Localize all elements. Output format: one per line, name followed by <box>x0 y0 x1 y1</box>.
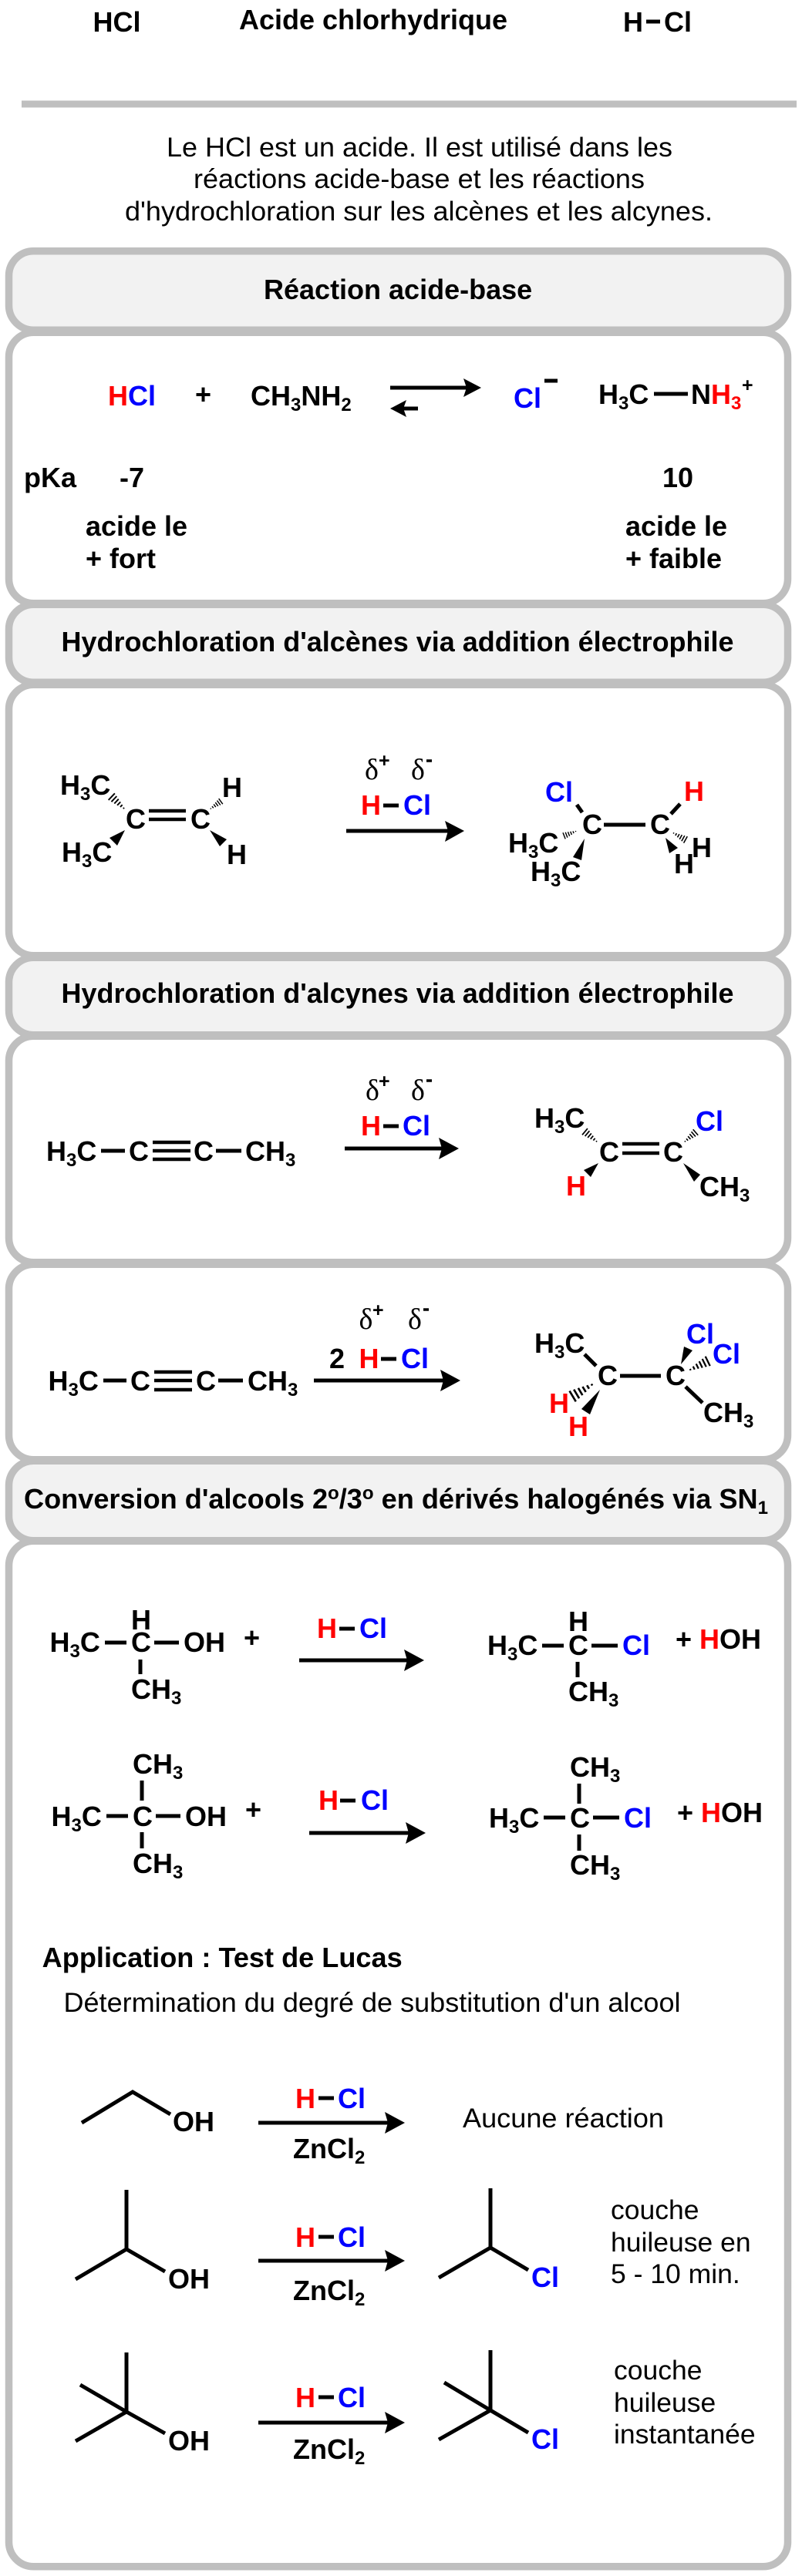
reagent: partial charges and 2 HCl: H <box>359 1343 379 1374</box>
tertiary chloride product: C <box>570 1802 590 1834</box>
heading: conversion of alcohols: Conversion d'alcools 2 <box>24 1483 327 1515</box>
reaction arrow <box>299 1650 424 1671</box>
tertiary chloride product: 3 <box>610 1766 620 1787</box>
reactant alkyne: C <box>194 1135 214 1167</box>
secondary alcohol reactant: C <box>131 1626 151 1658</box>
heading: Réaction acide-base <box>9 251 788 330</box>
product chloroalkene: H <box>566 1170 586 1202</box>
structure: H-Cl: H <box>623 6 643 38</box>
tertiary chloride product: CH <box>570 1849 610 1881</box>
description: Lucas test: Détermination du degré de substitution d'un alcool <box>63 1987 680 2018</box>
Lucas row 2: secondary alcohol: huileuse en <box>611 2227 751 2258</box>
heading: conversion of alcohols: o <box>328 1483 339 1504</box>
structure: H-Cl <box>623 6 692 38</box>
reactant alkyne: C <box>79 1365 99 1397</box>
product chloroalkane: H <box>508 827 528 859</box>
reactant alkyne: 3 <box>66 1150 76 1171</box>
reactant alkyne: H <box>48 1365 68 1397</box>
product chloroalkene: C <box>564 1102 585 1134</box>
Lucas row 3: tertiary alcohol: huileuse <box>614 2387 716 2418</box>
product chloroalkane: 3 <box>528 842 538 863</box>
intro paragraph: d'hydrochloration sur les alcènes et les alcynes. <box>125 196 713 227</box>
secondary chloride product: Cl <box>622 1629 650 1661</box>
product chloroalkene: H <box>534 1102 554 1134</box>
reactant alkene <box>60 769 247 872</box>
reactant alkene: H <box>60 769 80 801</box>
product chloroalkane: H <box>674 848 694 879</box>
plus sign: + <box>195 378 211 410</box>
reactant alkene: H <box>62 836 82 868</box>
secondary chloride product: H <box>568 1606 588 1637</box>
product gem-dichloride: H <box>568 1411 588 1442</box>
Lucas row 2: secondary alcohol: H <box>295 2221 315 2253</box>
subheading: Lucas test: Application : Test de Lucas <box>42 1942 403 1973</box>
Lucas row 1: primary alcohol: ZnCl <box>293 2133 355 2164</box>
note: strongest acid <box>86 510 187 574</box>
Lucas row 1: primary alcohol: Cl <box>338 2083 366 2114</box>
product chloroalkane: H <box>692 832 712 863</box>
heading: Réaction acide-base: Réaction acide-base <box>264 274 532 305</box>
reactant alkene: C <box>190 803 211 835</box>
product gem-dichloride: Cl <box>686 1318 714 1350</box>
Lucas row 3: tertiary alcohol: ZnCl <box>293 2433 355 2465</box>
reactant alkyne <box>48 1365 298 1401</box>
Lucas row 3: tertiary alcohol: 2 <box>355 2448 365 2469</box>
reagent: partial charges and HCl: H <box>361 1110 381 1142</box>
product chloroalkane: Cl <box>545 776 573 808</box>
heading: alkenes: Hydrochloration d'alcènes via addition électrophile <box>62 626 734 657</box>
tertiary chloride product: CH <box>570 1751 610 1783</box>
reagent: partial charges and HCl: + <box>379 750 390 772</box>
panel: conversion of alcohols and Lucas test <box>9 1461 788 2567</box>
Lucas row 2: secondary alcohol: Cl <box>531 2262 559 2293</box>
reaction arrow <box>309 1822 426 1844</box>
Lucas row 2: secondary alcohol: 5 - 10 min. <box>611 2258 740 2289</box>
reagent: partial charges and 2 HCl: δ <box>408 1303 422 1336</box>
tertiary chloride product: 3 <box>509 1817 519 1838</box>
reactant alkyne: 3 <box>285 1150 295 1171</box>
panel: hydrochlorination of alkenes <box>9 604 788 956</box>
heading: alkynes <box>9 957 788 1035</box>
product chloroalkene: Cl <box>696 1105 723 1137</box>
reagent HCl <box>318 1784 389 1816</box>
plus sign: + <box>245 1794 261 1825</box>
reactant alkyne <box>46 1135 295 1171</box>
reagent: partial charges and HCl: Cl <box>403 789 431 821</box>
reagent HCl: H <box>318 1784 339 1816</box>
secondary alcohol reactant: 3 <box>69 1641 80 1662</box>
reagent HCl <box>317 1613 387 1644</box>
product chloroalkane: C <box>538 827 558 859</box>
tertiary alcohol reactant <box>51 1748 227 1883</box>
product chloroalkene: CH <box>699 1171 740 1202</box>
secondary alcohol reactant <box>49 1604 225 1709</box>
reagent: partial charges and HCl <box>361 1071 432 1142</box>
secondary chloride product: C <box>568 1629 588 1661</box>
product: methylammonium: 3 <box>731 393 741 414</box>
product gem-dichloride: 3 <box>554 1342 564 1363</box>
panel: acid-base reaction <box>9 251 788 604</box>
tertiary alcohol reactant: CH <box>133 1848 173 1879</box>
tertiary chloride product: 3 <box>610 1864 620 1885</box>
intro paragraph: Le HCl est un acide. Il est utilisé dans les <box>167 132 672 163</box>
note: weakest acid <box>625 510 727 574</box>
reagent: partial charges and HCl: δ <box>366 1074 379 1107</box>
reactant alkyne: C <box>130 1365 150 1397</box>
equilibrium arrows <box>390 378 481 417</box>
structure: H-Cl: Cl <box>664 6 692 38</box>
product chloroalkene: 3 <box>740 1185 750 1206</box>
Lucas row 3: tertiary alcohol: instantanée <box>614 2419 756 2450</box>
Lucas row 1: primary alcohol: 2 <box>355 2147 365 2168</box>
secondary chloride product <box>487 1606 650 1711</box>
reactant alkene: H <box>227 839 247 870</box>
heading: alkenes <box>9 604 788 682</box>
reactant alkyne: CH <box>248 1365 288 1397</box>
product: chloride ion: Cl <box>514 382 541 414</box>
reactant alkyne: H <box>46 1135 66 1167</box>
reactant: CH3NH2: NH <box>301 380 341 412</box>
product gem-dichloride: CH <box>703 1397 743 1428</box>
product chloroalkane: 3 <box>551 870 561 891</box>
product chloroalkene <box>534 1102 750 1206</box>
tertiary alcohol reactant: C <box>82 1801 102 1832</box>
tertiary alcohol reactant: 3 <box>173 1862 183 1883</box>
secondary chloride product: C <box>517 1629 537 1661</box>
secondary chloride product: CH <box>568 1676 608 1707</box>
Lucas row 1: primary alcohol: Aucune réaction <box>463 2103 664 2134</box>
Lucas row 3: tertiary alcohol <box>76 2350 756 2469</box>
secondary chloride product: 3 <box>507 1644 517 1665</box>
heading: conversion of alcohols: o <box>362 1483 374 1504</box>
product chloroalkane: C <box>582 809 602 840</box>
reagent HCl: Cl <box>359 1613 387 1644</box>
reagent: partial charges and HCl: H <box>361 789 381 821</box>
Lucas row 1: primary alcohol: H <box>295 2083 315 2114</box>
product gem-dichloride <box>534 1318 753 1442</box>
panel: hydrochlorination of alkynes, two equivalents <box>9 1264 788 1460</box>
reagent HCl: H <box>317 1613 337 1644</box>
note: strongest acid: + fort <box>86 543 156 574</box>
secondary alcohol reactant: CH <box>131 1673 171 1705</box>
reactant alkyne: 3 <box>288 1380 298 1401</box>
Lucas row 3: tertiary alcohol: Cl <box>531 2423 559 2455</box>
secondary alcohol reactant: H <box>131 1604 151 1636</box>
heading: conversion of alcohols <box>9 1461 788 1541</box>
Lucas row 3: tertiary alcohol: Cl <box>338 2382 366 2413</box>
product chloroalkene: C <box>599 1136 619 1168</box>
tertiary chloride product: Cl <box>624 1802 652 1834</box>
product: methylammonium: H <box>598 378 618 410</box>
tertiary alcohol reactant: OH <box>185 1801 227 1832</box>
water byproduct: + HOH <box>676 1623 761 1655</box>
product: methylammonium: NH <box>691 378 731 410</box>
product gem-dichloride: 3 <box>743 1411 753 1432</box>
secondary alcohol reactant: OH <box>184 1626 225 1658</box>
product gem-dichloride: Cl <box>713 1338 740 1370</box>
product chloroalkane: C <box>561 856 581 887</box>
reactant alkene: C <box>90 769 110 801</box>
reactant alkene: C <box>92 836 112 868</box>
tertiary alcohol reactant: CH <box>133 1748 173 1780</box>
tertiary alcohol reactant: C <box>133 1801 153 1832</box>
tertiary chloride product <box>489 1751 652 1885</box>
product: chloride ion <box>514 381 558 414</box>
Lucas row 3: tertiary alcohol: H <box>295 2382 315 2413</box>
reactant alkene: H <box>222 772 242 803</box>
reactant alkene: C <box>126 803 146 835</box>
reactant alkyne: C <box>129 1135 149 1167</box>
reactant alkene: 3 <box>80 784 90 805</box>
formula: HCl: HCl <box>93 6 140 38</box>
reactant alkene: 3 <box>82 851 92 872</box>
reactant: CH3NH2: CH <box>251 380 291 412</box>
Lucas row 3: tertiary alcohol: OH <box>168 2425 210 2457</box>
plus sign: + <box>244 1622 260 1653</box>
note: weakest acid: acide le <box>625 510 727 542</box>
reactant alkyne: 3 <box>68 1380 79 1401</box>
secondary chloride product: H <box>487 1629 507 1661</box>
product: methylammonium <box>598 375 753 414</box>
tertiary chloride product: H <box>489 1802 509 1834</box>
secondary alcohol reactant: H <box>49 1626 69 1658</box>
product chloroalkene: C <box>663 1136 683 1168</box>
Lucas row 2: secondary alcohol: 2 <box>355 2289 365 2310</box>
Lucas row 2: secondary alcohol: couche <box>611 2194 699 2225</box>
reagent HCl: Cl <box>361 1784 389 1816</box>
product: methylammonium: + <box>742 375 753 396</box>
reactant: CH3NH2: 2 <box>341 395 352 415</box>
reactant alkyne: C <box>196 1365 216 1397</box>
reagent: partial charges and HCl: δ <box>365 754 379 786</box>
panel: hydrochlorination of alkynes, one equivalent <box>9 957 788 1263</box>
tertiary alcohol reactant: H <box>51 1801 71 1832</box>
Lucas row 2: secondary alcohol <box>76 2188 751 2310</box>
product chloroalkane: H <box>531 856 551 887</box>
secondary alcohol reactant: C <box>80 1626 100 1658</box>
product gem-dichloride: C <box>598 1360 618 1391</box>
reaction arrow <box>346 821 464 842</box>
reaction arrow <box>314 1370 460 1391</box>
reactant alkyne: CH <box>245 1135 285 1167</box>
product gem-dichloride: C <box>564 1327 585 1359</box>
reagent: partial charges and 2 HCl: + <box>372 1300 384 1321</box>
secondary chloride product: 3 <box>608 1690 618 1711</box>
reaction arrow <box>345 1138 459 1159</box>
reagent: partial charges and HCl: δ <box>411 1074 425 1107</box>
Lucas row 1: primary alcohol <box>82 2083 664 2168</box>
Lucas row 3: tertiary alcohol: couche <box>614 2355 702 2386</box>
product chloroalkane: C <box>650 809 670 840</box>
product chloroalkane: H <box>684 775 704 807</box>
reagent: partial charges and 2 HCl: Cl <box>401 1343 429 1374</box>
product chloroalkene: 3 <box>554 1117 564 1138</box>
reactant: HCl: HCl <box>108 380 156 412</box>
intro paragraph: réactions acide-base et les réactions <box>194 163 645 194</box>
reagent: partial charges and HCl: Cl <box>403 1110 430 1142</box>
product gem-dichloride: H <box>549 1387 569 1419</box>
reagent: partial charges and HCl: δ <box>411 754 425 786</box>
tertiary alcohol reactant: 3 <box>71 1815 82 1836</box>
tertiary chloride product: C <box>519 1802 539 1834</box>
reagent: partial charges and 2 HCl: 2 <box>329 1343 345 1374</box>
product: methylammonium: C <box>628 378 649 410</box>
note: strongest acid: acide le <box>86 510 187 542</box>
tertiary alcohol reactant: 3 <box>173 1763 183 1784</box>
reagent: partial charges and HCl: + <box>379 1071 390 1092</box>
pKa label: pKa <box>24 462 77 493</box>
Lucas row 1: primary alcohol: OH <box>173 2106 214 2137</box>
divider rule <box>22 100 797 108</box>
reagent: partial charges and HCl <box>361 750 432 821</box>
secondary alcohol reactant: 3 <box>171 1688 181 1709</box>
heading: conversion of alcohols: 1 <box>758 1498 768 1518</box>
water byproduct: + HOH <box>677 1797 763 1828</box>
reactant alkyne: C <box>76 1135 96 1167</box>
product gem-dichloride: C <box>666 1360 686 1391</box>
product gem-dichloride: H <box>534 1327 554 1359</box>
note: weakest acid: + faible <box>625 543 722 574</box>
reagent: partial charges and 2 HCl <box>329 1300 429 1374</box>
Lucas row 2: secondary alcohol: Cl <box>338 2221 366 2253</box>
product: methylammonium: 3 <box>618 393 628 414</box>
heading: conversion of alcohols: en dérivés halogénés via SN <box>374 1483 758 1515</box>
pKa HCl: -7 <box>120 462 144 493</box>
heading: conversion of alcohols: /3 <box>339 1483 362 1515</box>
heading: alkynes: Hydrochloration d'alcynes via addition électrophile <box>62 977 734 1009</box>
product chloroalkane <box>508 775 712 891</box>
intro paragraph <box>125 132 713 227</box>
Lucas row 2: secondary alcohol: OH <box>168 2263 210 2295</box>
reactant: CH3NH2: 3 <box>291 395 301 415</box>
Lucas row 2: secondary alcohol: ZnCl <box>293 2275 355 2306</box>
reagent: partial charges and 2 HCl: δ <box>359 1303 372 1336</box>
title: Acide chlorhydrique: Acide chlorhydrique <box>239 4 507 35</box>
pKa ammonium: 10 <box>662 462 693 493</box>
